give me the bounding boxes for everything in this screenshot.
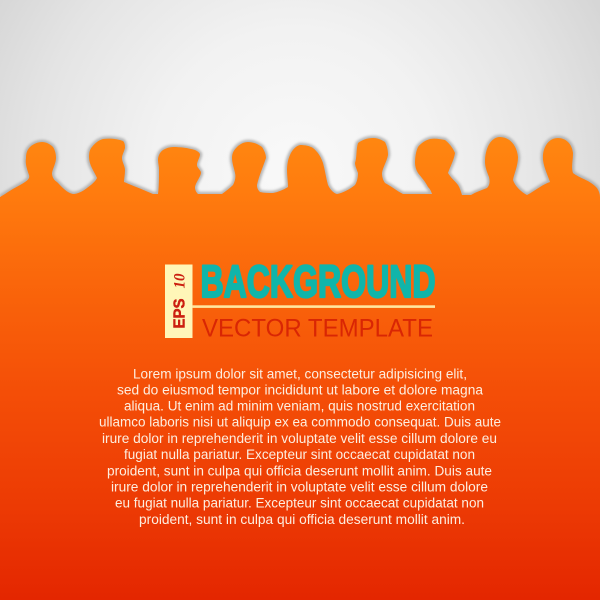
body text block: ullamco laboris nisi ut aliquip ex ea commodo consequat. Duis aute xyxy=(99,415,501,430)
body text block: irure dolor in reprehenderit in voluptate velit esse cillum dolore xyxy=(111,479,488,494)
body text block: sed do eiusmod tempor incididunt ut labore et dolore magna xyxy=(117,382,483,397)
body text block: aliqua. Ut enim ad minim veniam, quis nostrud exercitation xyxy=(124,398,475,413)
body text block: Lorem ipsum dolor sit amet, consectetur adipisicing elit, xyxy=(133,366,467,381)
body text block: proident, sunt in culpa qui officia deserunt mollit anim. xyxy=(139,512,465,527)
heading: BACKGROUND: BACKGROUND xyxy=(200,256,436,307)
silhouette shadow halo xyxy=(0,137,600,197)
body text block: proident, sunt in culpa qui officia deserunt mollit anim. Duis aute xyxy=(107,463,492,478)
body text block: eu fugiat nulla pariatur. Excepteur sint occaecat cupidatat non xyxy=(115,496,484,511)
body text block: fugiat nulla pariatur. Excepteur sint occaecat cupidatat non xyxy=(124,447,475,462)
subheading: VECTOR TEMPLATE: VECTOR TEMPLATE xyxy=(202,314,433,342)
orange crowd silhouettes and panel xyxy=(0,137,600,600)
EPS 10 badge: EPS xyxy=(172,298,188,328)
EPS 10 badge: 10 xyxy=(172,273,188,288)
body text block xyxy=(99,366,501,527)
heading divider line xyxy=(192,305,435,308)
body text block: irure dolor in reprehenderit in voluptate velit esse cillum dolore eu xyxy=(102,431,497,446)
EPS 10 badge xyxy=(165,264,192,338)
